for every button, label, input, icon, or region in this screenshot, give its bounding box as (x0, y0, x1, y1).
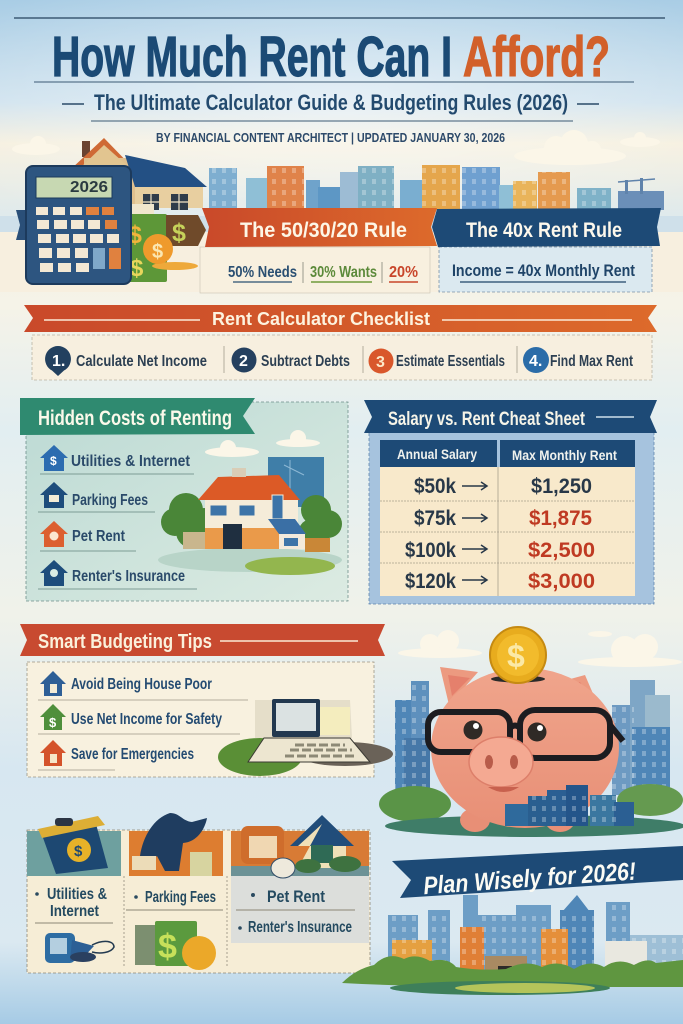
panel: smart budgeting tips (20, 624, 393, 777)
banner: 50/30/20 rule (202, 208, 437, 247)
row: 75k (414, 507, 592, 530)
split: needs: 50% Needs (228, 264, 297, 281)
step 2 (232, 348, 350, 372)
title: How Much Rent Can I (52, 25, 452, 89)
card text: parking (126, 889, 223, 910)
item: insurance: Renter's Insurance (72, 568, 185, 585)
illustration: bottom city (342, 895, 683, 995)
tip: emergencies (38, 740, 194, 770)
icon: calculator (26, 166, 131, 284)
row: 100k: $100k (405, 539, 456, 562)
item: insurance (38, 560, 197, 589)
clouds (12, 130, 660, 165)
row: 120k: $120k (405, 570, 456, 593)
icon: money: $ (152, 241, 163, 263)
banner: checklist (24, 305, 657, 332)
subtitle: The Ultimate Calculator Guide & Budgeting Rules (2026) (94, 90, 568, 115)
panel: hidden costs (20, 398, 348, 601)
row: 50k: $50k (414, 475, 456, 498)
step 1: 1. (52, 353, 65, 370)
icon: money: $ (172, 219, 186, 247)
row: 120k: $3,000 (528, 570, 595, 593)
step 3: 3 (376, 354, 385, 371)
item: parking: Parking Fees (72, 492, 148, 509)
step 3 (368, 348, 505, 374)
banner: plan wisely: Plan Wisely for 2026! (422, 857, 637, 900)
panel: checklist steps (32, 335, 652, 380)
banner: 50/30/20 rule: The 50/30/20 Rule (240, 219, 407, 242)
illustration: house (158, 430, 342, 575)
banner: budgeting tips (20, 624, 385, 656)
banner: checklist: Rent Calculator Checklist (212, 308, 430, 329)
illustration: laptop and desk (218, 699, 393, 776)
row: 75k: $1,875 (529, 507, 592, 530)
row: 50k: $1,250 (531, 475, 592, 498)
tip: net income (38, 704, 240, 734)
icon: wallet (38, 816, 108, 874)
icon: cash and coin (135, 921, 216, 970)
banner: hidden costs: Hidden Costs of Renting (38, 407, 232, 430)
tip: emergencies: Save for Emergencies (71, 746, 194, 763)
banner: 40x rule (432, 208, 661, 247)
step 4 (523, 347, 633, 373)
coin (490, 627, 546, 683)
card text: pet rent (236, 887, 355, 910)
checklist section (24, 305, 657, 380)
icon: cash and coin: $ (158, 928, 177, 966)
item: parking (38, 482, 155, 512)
icon: house behind calculator (70, 138, 207, 210)
salary table: Max Monthly Rent (512, 447, 617, 463)
coin: $ (507, 638, 525, 674)
row: 100k (405, 539, 595, 562)
banner: cheat sheet: Salary vs. Rent Cheat Sheet (388, 408, 585, 430)
split: savings: 20% (389, 264, 418, 281)
row: 120k (405, 570, 595, 593)
piggy bank (428, 627, 623, 832)
tip: net income: Use Net Income for Safety (71, 711, 222, 728)
icon: mug and house (241, 815, 361, 878)
50/30/20 panel (200, 208, 437, 293)
banner: budgeting tips: Smart Budgeting Tips (38, 631, 212, 653)
banner: 40x rule: The 40x Rent Rule (466, 219, 622, 242)
title block (14, 18, 665, 145)
icon: money: $ (128, 221, 142, 249)
step 2: Subtract Debts (261, 353, 350, 370)
icon: device (45, 933, 114, 963)
item: utilities (40, 445, 194, 474)
icon: money (122, 204, 206, 282)
skyline (0, 165, 683, 292)
banner: cheat sheet (364, 400, 657, 433)
icon: wallet: $ (74, 843, 83, 860)
item: utilities: Utilities & Internet (71, 453, 191, 470)
card text: pet rent: Pet Rent (267, 887, 325, 906)
tip: net income: $ (49, 715, 57, 730)
step 3: Estimate Essentials (396, 353, 505, 370)
card text: utilities: Utilities & (47, 886, 107, 903)
tip: house poor (38, 671, 248, 700)
row: 75k: $75k (414, 507, 456, 530)
40x rule panel (432, 208, 661, 292)
byline: BY FINANCIAL CONTENT ARCHITECT | UPDATED JANUARY 30, 2026 (156, 131, 505, 145)
icon: money: $ (130, 255, 144, 282)
item: pet rent: Pet Rent (72, 528, 126, 545)
step 4: Find Max Rent (550, 353, 633, 370)
card text: parking: Parking Fees (145, 889, 216, 906)
row: 100k: $2,500 (528, 539, 595, 562)
item: pet rent (40, 521, 136, 551)
banner: hidden costs (20, 398, 255, 435)
title accent word: Afford? (463, 25, 610, 89)
card text: utilities: Internet (50, 903, 100, 920)
step 2: 2 (239, 353, 248, 370)
step 1 (45, 346, 207, 376)
panel: cost cards (27, 813, 370, 973)
split: wants: 30% Wants (310, 264, 377, 281)
illustration: piggy bank with city (379, 627, 683, 837)
card text: insurance: Renter's Insurance (248, 919, 352, 936)
foreground city (505, 785, 634, 826)
row: 50k (414, 475, 592, 498)
icon: dog (132, 813, 212, 876)
panel: salary cheat sheet (364, 400, 657, 604)
item: utilities: $ (50, 454, 57, 468)
card text: utilities (35, 886, 113, 923)
step 1: Calculate Net Income (76, 353, 207, 370)
calculator display: 2026 (70, 179, 108, 196)
formula: Income = 40x Monthly Rent (452, 262, 635, 280)
step 4: 4. (529, 353, 542, 370)
glasses (428, 710, 623, 758)
salary table (380, 440, 635, 596)
tip: house poor: Avoid Being House Poor (71, 676, 212, 693)
salary table: Annual Salary (397, 446, 477, 462)
